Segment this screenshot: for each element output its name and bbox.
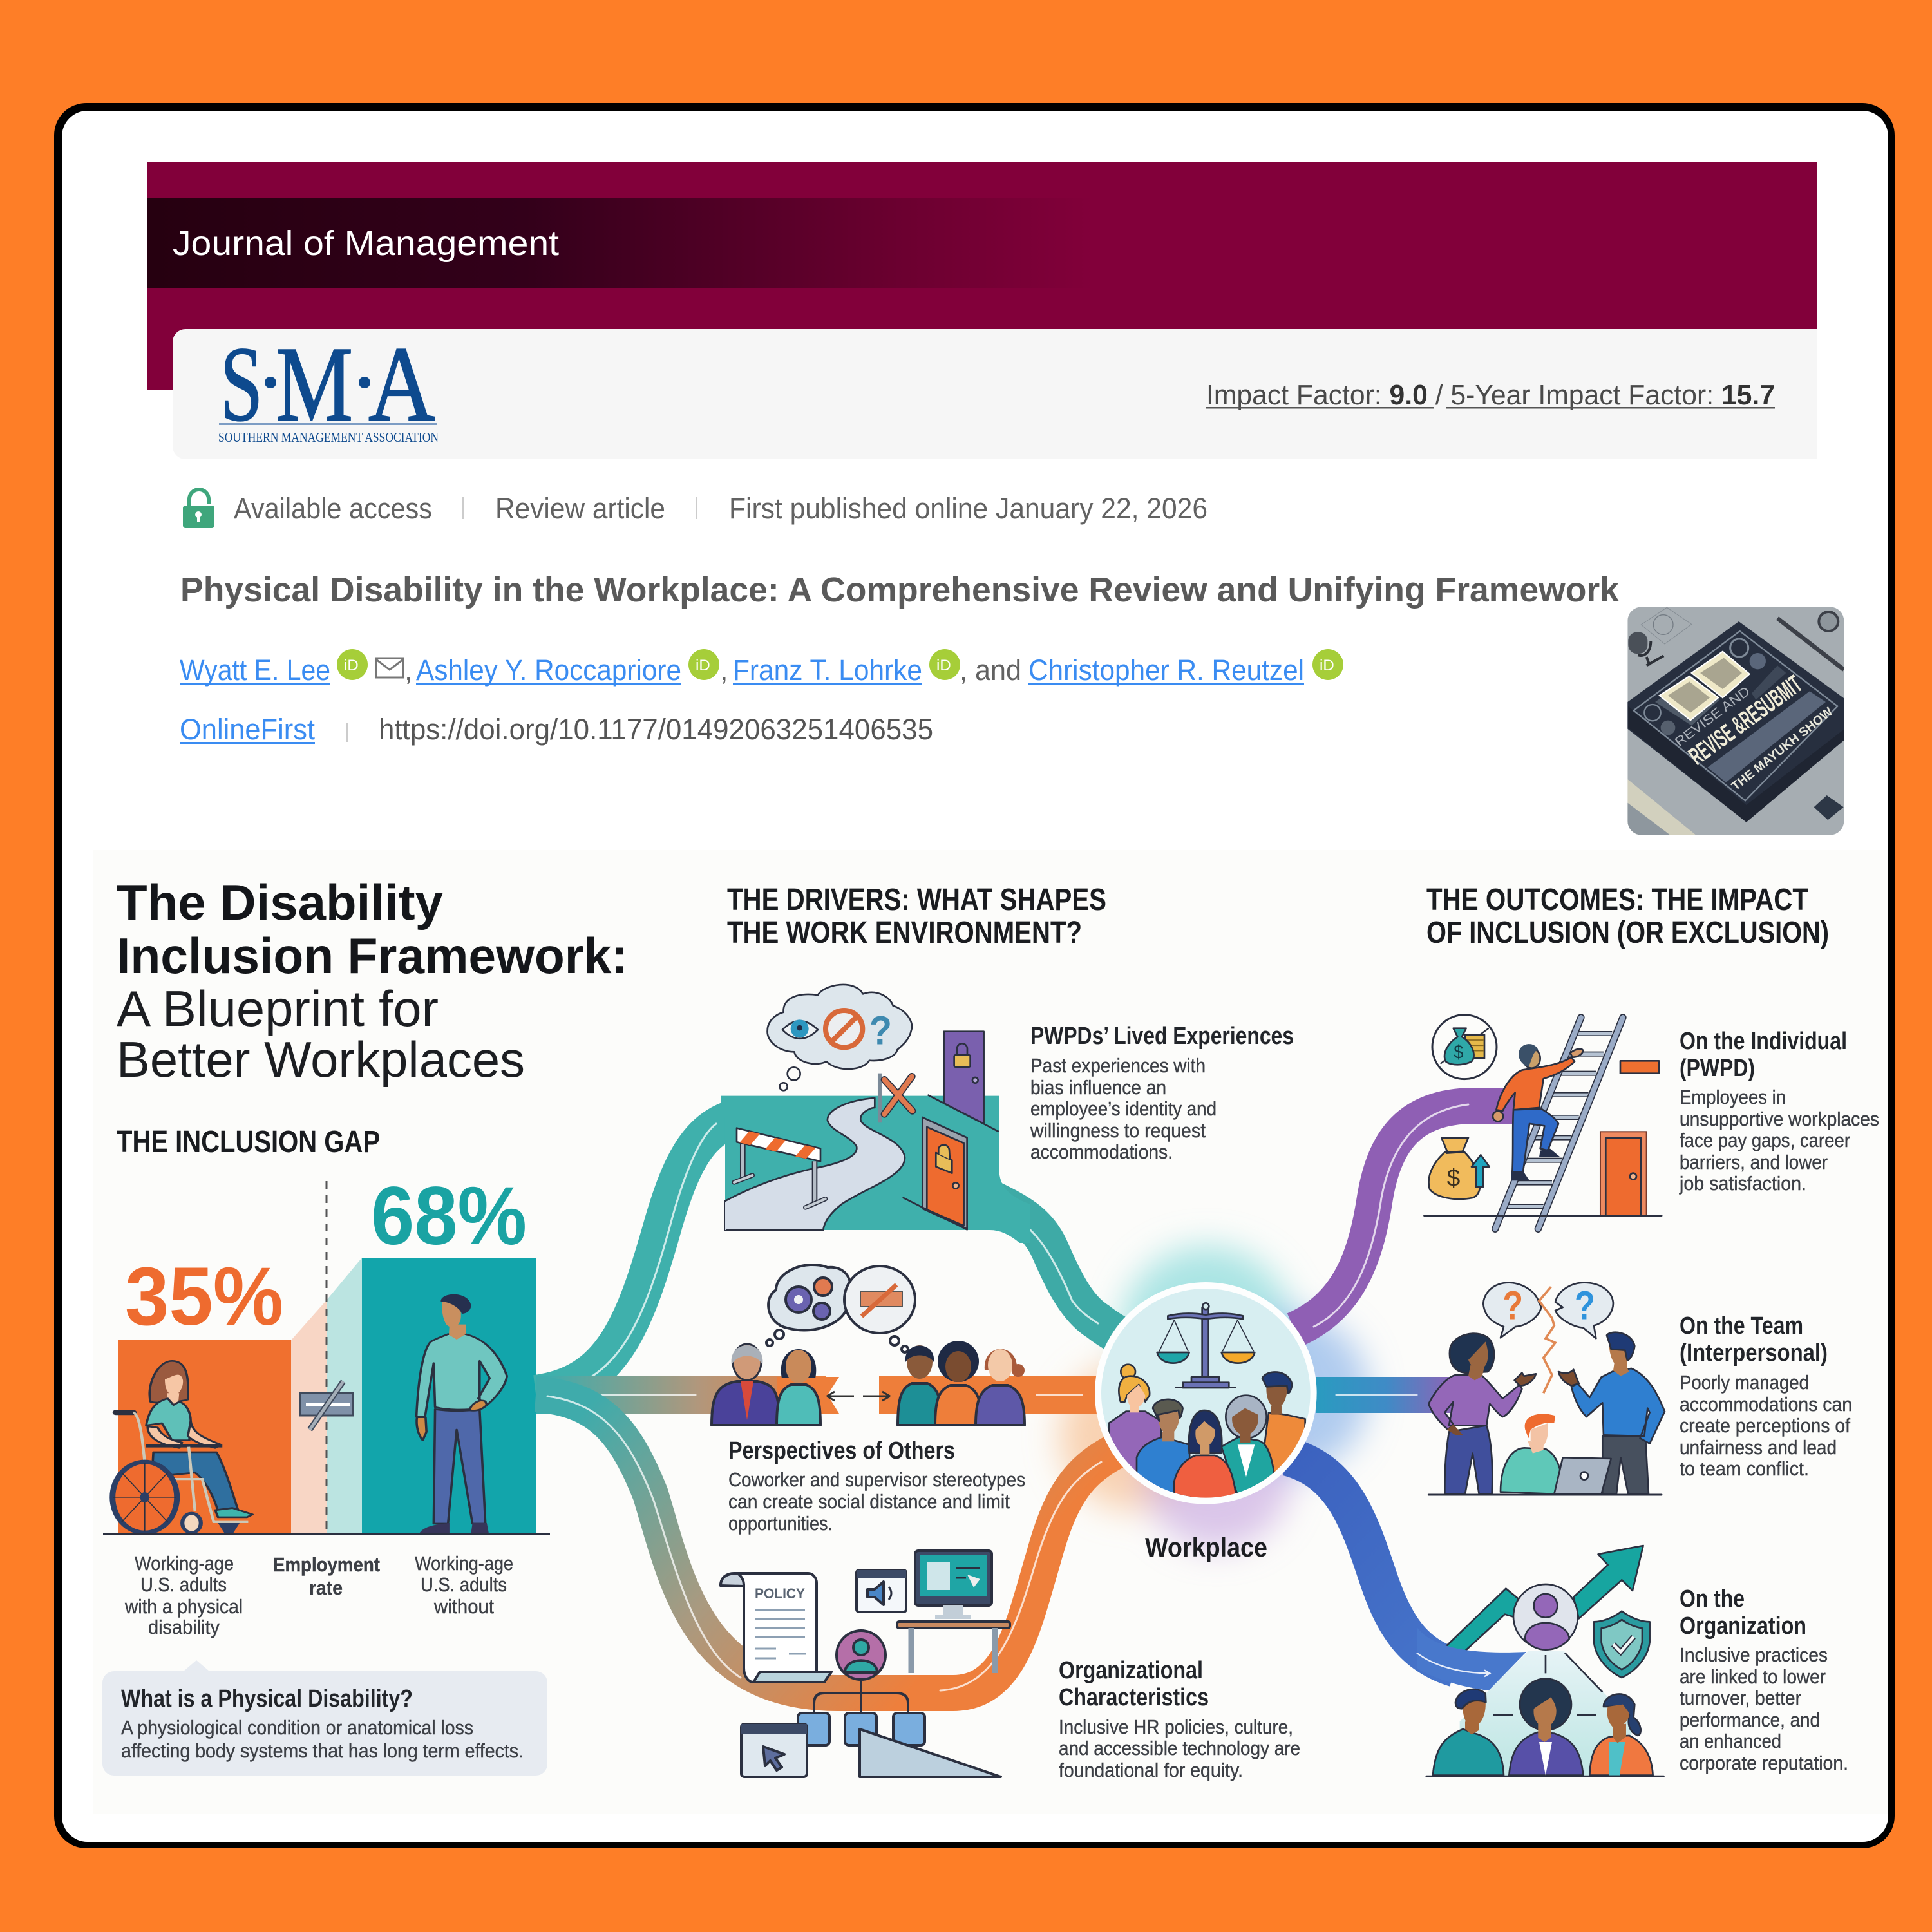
text: organization outcome: an enhanced xyxy=(1680,1730,1781,1752)
policy scroll xyxy=(721,1573,831,1682)
people group xyxy=(1109,1365,1305,1511)
heading: outcomes: THE OUTCOMES: THE IMPACT xyxy=(1426,883,1808,917)
heading: inclusion gap: THE INCLUSION GAP xyxy=(117,1125,380,1159)
label: with disability xyxy=(124,1552,243,1638)
article title: Physical Disability in the Workplace: A Comprehensive Review and Unifying Framework xyxy=(180,571,1620,609)
orange notches xyxy=(777,1377,839,1414)
speech bubbles: ? xyxy=(1502,1283,1523,1328)
text: individual outcome: face pay gaps, career xyxy=(1680,1129,1850,1151)
text: lived experiences: PWPDs’ Lived Experiences xyxy=(1030,1023,1294,1050)
user node xyxy=(1513,1584,1578,1650)
text: organization outcome: are linked to lower xyxy=(1680,1665,1826,1688)
bar labels xyxy=(124,1552,513,1638)
growth arrow xyxy=(1444,1546,1643,1653)
climbing person xyxy=(1493,1044,1583,1180)
text: individual outcome: Employees in xyxy=(1680,1086,1786,1108)
floor xyxy=(1425,1213,1662,1218)
impact factor: Impact Factor: 9.0 / 5-Year Impact Factor: 15.7 xyxy=(1206,379,1775,411)
text: team outcome: accommodations can xyxy=(1680,1393,1852,1416)
text: organization outcome: On the xyxy=(1680,1586,1745,1613)
journal info panel xyxy=(173,325,1817,459)
thought cloud: ? xyxy=(869,1009,892,1054)
icon: money circle: $ xyxy=(1454,1041,1464,1063)
podcast thumbnail xyxy=(1626,607,1846,835)
journal header banner xyxy=(147,162,1817,390)
text: lived experiences: Past experiences with xyxy=(1030,1054,1206,1077)
policy scroll: POLICY xyxy=(755,1586,805,1602)
flow ribbons: workplace to outcomes xyxy=(1288,1104,1515,1668)
article meta row xyxy=(183,489,1208,528)
icon: standing person xyxy=(417,1294,507,1534)
authors: , and xyxy=(960,654,1021,687)
text: lived experiences: accommodations. xyxy=(1030,1141,1173,1163)
ribbon: individual xyxy=(1294,1104,1515,1330)
road barrier xyxy=(734,1128,826,1208)
speech bubbles: ? xyxy=(1575,1283,1595,1328)
infographic title: Better Workplaces xyxy=(117,1031,525,1088)
infographic title xyxy=(117,874,628,1088)
text: organizational characteristics: and accessible technology are xyxy=(1059,1737,1300,1759)
heading: outcomes xyxy=(1426,883,1829,950)
label: employment rate: rate xyxy=(309,1577,343,1599)
connector lines xyxy=(1493,1653,1602,1715)
SMA logo: SOUTHERN MANAGEMENT ASSOCIATION xyxy=(218,430,439,445)
people right xyxy=(898,1341,1025,1425)
thought cloud xyxy=(768,985,912,1090)
thought bubbles xyxy=(766,1265,915,1352)
text: team outcome: to team conflict. xyxy=(1680,1457,1809,1480)
authors: iD xyxy=(696,657,710,674)
text: lived experiences xyxy=(1030,1023,1294,1163)
illustration: team outcome xyxy=(1428,1283,1665,1495)
callout: what is a physical disability: affecting body systems that has long term effects. xyxy=(121,1739,524,1762)
infographic title: The Disability xyxy=(117,874,443,931)
team members xyxy=(1433,1679,1653,1776)
podcast thumbnail: THE MAYUKH SHOW xyxy=(1729,705,1836,793)
winding road xyxy=(725,1098,905,1230)
value: 35%: 35% xyxy=(125,1251,283,1343)
ribbon: team xyxy=(1316,1377,1461,1413)
infographic panel xyxy=(93,850,1888,1814)
icon: person in wheelchair xyxy=(113,1361,252,1535)
ribbon: organization arrow xyxy=(1288,1457,1455,1668)
meta text: Review article xyxy=(495,492,665,525)
value: 68%: 68% xyxy=(371,1170,527,1262)
callout: what is a physical disability xyxy=(102,1660,547,1776)
authors: , xyxy=(404,654,413,687)
authors: Franz T. Lohrke xyxy=(733,654,922,687)
SMA logo: A xyxy=(368,325,435,443)
people left xyxy=(712,1344,820,1425)
text: perspectives of others: Coworker and supervisor stereotypes xyxy=(728,1468,1025,1491)
text: organizational characteristics xyxy=(1059,1657,1300,1781)
user avatar xyxy=(837,1631,886,1680)
icon: money bag up: $ xyxy=(1447,1165,1460,1191)
icon: open lock xyxy=(183,489,214,528)
authors: iD xyxy=(344,657,359,674)
authors xyxy=(180,649,1343,687)
text: organization outcome: corporate reputation. xyxy=(1680,1752,1848,1774)
ladder xyxy=(1495,1018,1623,1229)
doi row: OnlineFirst xyxy=(180,713,315,746)
text: organizational characteristics: foundational for equity. xyxy=(1059,1759,1243,1781)
baseline xyxy=(103,1533,550,1535)
text: lived experiences: employee’s identity and xyxy=(1030,1097,1217,1120)
illustration: organizational characteristics xyxy=(721,1551,1010,1777)
label: without disability: without xyxy=(433,1595,494,1618)
text: organizational characteristics: Characteristics xyxy=(1059,1684,1209,1711)
text: organization outcome xyxy=(1680,1586,1848,1774)
flow ribbons: drivers to workplace xyxy=(536,1115,1140,1693)
text: organizational characteristics: Organizational xyxy=(1059,1657,1203,1684)
text: individual outcome: unsupportive workplaces xyxy=(1680,1108,1879,1130)
label: without disability: U.S. adults xyxy=(421,1573,507,1596)
text: individual outcome: barriers, and lower xyxy=(1680,1151,1828,1173)
text: individual outcome: (PWPD) xyxy=(1680,1055,1755,1082)
computer desk xyxy=(897,1551,1010,1673)
text: organization outcome: Inclusive practices xyxy=(1680,1643,1828,1666)
ribbon: lived experiences xyxy=(536,1115,1140,1394)
authors: Wyatt E. Lee xyxy=(180,654,330,687)
heading: outcomes: OF INCLUSION (OR EXCLUSION) xyxy=(1426,916,1829,950)
text: organization outcome: turnover, better xyxy=(1680,1687,1801,1709)
text: organizational characteristics: Inclusive HR policies, culture, xyxy=(1059,1716,1293,1738)
woman xyxy=(1428,1334,1536,1494)
infographic title: Inclusion Framework: xyxy=(117,927,628,984)
label: without disability xyxy=(415,1552,513,1618)
text: organization outcome: Organization xyxy=(1680,1613,1806,1640)
speaker window xyxy=(857,1570,906,1612)
icon: scales of justice xyxy=(1157,1303,1255,1388)
man right xyxy=(1558,1332,1665,1494)
text: lived experiences: bias influence an xyxy=(1030,1076,1166,1099)
text: individual outcome xyxy=(1679,1028,1879,1195)
authors: iD xyxy=(1320,657,1334,674)
text: individual outcome: On the Individual xyxy=(1680,1028,1847,1055)
callout: what is a physical disability: What is a Physical Disability? xyxy=(121,1685,413,1712)
dashed arrows xyxy=(827,1392,890,1401)
meta text: First published online January 22, 2026 xyxy=(729,492,1208,525)
X flag xyxy=(880,1074,913,1122)
floor xyxy=(1426,1774,1663,1779)
podcast thumbnail: REVISE &RESUBMIT xyxy=(1683,670,1807,771)
ribbon: perspectives of others xyxy=(536,1376,1104,1414)
label: with disability: U.S. adults xyxy=(140,1573,227,1596)
podcast thumbnail: REVISE AND xyxy=(1672,684,1753,750)
authors: iD xyxy=(936,657,951,674)
infographic title: A Blueprint for xyxy=(117,980,439,1037)
heading: drivers xyxy=(727,883,1106,950)
text: perspectives of others: opportunities. xyxy=(728,1512,833,1535)
orange door xyxy=(904,1117,967,1229)
SMA logo: M xyxy=(276,325,353,443)
illustration: organization outcome xyxy=(1417,1546,1663,1776)
authors: Christopher R. Reutzel xyxy=(1028,654,1304,687)
workplace glow xyxy=(1059,1246,1368,1549)
callout: what is a physical disability: A physiological condition or anatomical loss xyxy=(121,1716,473,1739)
text: perspectives of others: can create social distance and limit xyxy=(728,1490,1010,1513)
text: perspectives of others xyxy=(728,1437,1025,1535)
text: individual outcome: job satisfaction. xyxy=(1679,1172,1806,1195)
workplace circle xyxy=(1095,1282,1317,1562)
heading: drivers: THE DRIVERS: WHAT SHAPES xyxy=(727,883,1106,917)
lightning xyxy=(1539,1287,1555,1393)
SMA logo: S xyxy=(220,325,263,443)
meta text: Available access xyxy=(234,492,432,525)
authors: Ashley Y. Roccapriore xyxy=(416,654,681,687)
floor xyxy=(1428,1492,1662,1497)
purple door xyxy=(929,1032,998,1132)
label: with disability: disability xyxy=(148,1616,220,1638)
ramp xyxy=(860,1729,1001,1777)
teal landscape xyxy=(725,1116,1030,1243)
illustration: lived experiences scene xyxy=(721,985,1030,1243)
text: lived experiences: willingness to request xyxy=(1030,1119,1206,1142)
text: perspectives of others: Perspectives of Others xyxy=(728,1437,955,1464)
text: team outcome xyxy=(1680,1312,1852,1480)
label: with disability: with a physical xyxy=(124,1595,243,1618)
text: team outcome: create perceptions of xyxy=(1680,1414,1850,1437)
text: team outcome: unfairness and lead xyxy=(1680,1436,1837,1459)
text: team outcome: On the Team xyxy=(1680,1312,1803,1340)
label: employment rate xyxy=(273,1553,380,1599)
icon: not-equal sign xyxy=(300,1381,353,1430)
SMA logo xyxy=(218,325,439,445)
browser window xyxy=(741,1724,807,1777)
text: team outcome: (Interpersonal) xyxy=(1680,1340,1828,1367)
label: without disability: Working-age xyxy=(415,1552,513,1575)
text: team outcome: Poorly managed xyxy=(1680,1371,1809,1394)
illustration: perspectives of others xyxy=(712,1265,1025,1425)
meta text xyxy=(234,492,1208,525)
icon: money bag up xyxy=(1428,1138,1490,1199)
illustration: individual outcome xyxy=(1425,1015,1662,1229)
icon: money circle xyxy=(1432,1015,1497,1079)
ribbon: organizational characteristics xyxy=(536,1394,1133,1693)
seated person with laptop xyxy=(1501,1414,1611,1494)
label: employment rate: Employment xyxy=(273,1553,380,1576)
bar chart: inclusion gap xyxy=(103,1170,550,1535)
blue flow arrowhead xyxy=(1417,1627,1526,1690)
speech bubbles xyxy=(1483,1283,1613,1338)
workplace label: Workplace xyxy=(1145,1532,1267,1562)
doi row: https://doi.org/10.1177/01492063251406535 xyxy=(379,713,933,746)
heading: drivers: THE WORK ENVIRONMENT? xyxy=(727,916,1082,950)
door and dash xyxy=(1600,1061,1659,1216)
icon: shield xyxy=(1594,1611,1650,1678)
journal name: Journal of Management xyxy=(173,224,559,263)
org chart xyxy=(798,1680,925,1745)
authors: , xyxy=(720,654,728,687)
label: with disability: Working-age xyxy=(135,1552,234,1575)
text: organization outcome: performance, and xyxy=(1680,1709,1820,1731)
